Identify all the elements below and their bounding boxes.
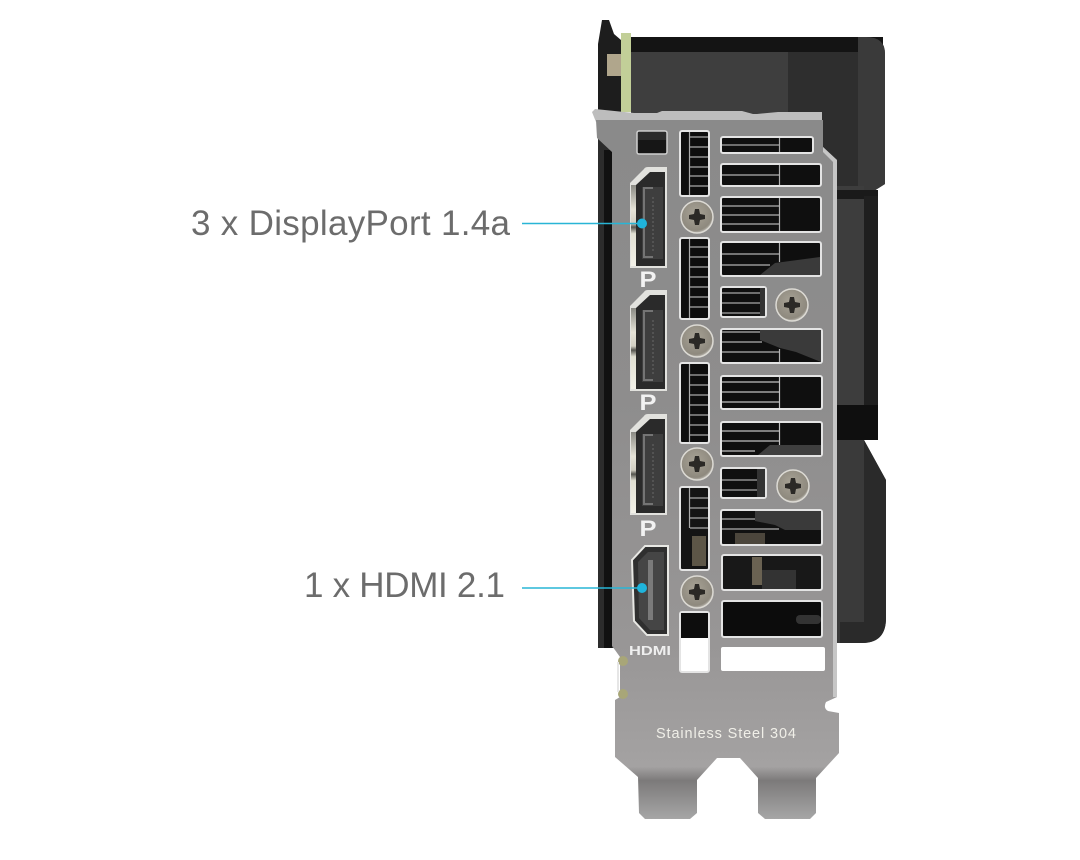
screw 6 <box>777 470 809 502</box>
bracket material label: Stainless Steel 304 <box>656 726 796 742</box>
vent column 2 <box>680 238 709 319</box>
slot 11 <box>722 555 822 590</box>
DisplayPort connector 3 <box>630 414 667 515</box>
callout: HDMI <box>304 566 647 605</box>
screw 2 <box>681 325 713 357</box>
slot 12 <box>722 601 822 637</box>
rear PCB and backplate edge <box>598 20 631 648</box>
DisplayPort logo 1: P <box>640 267 656 292</box>
stainless steel bracket plate <box>596 120 839 819</box>
label: HDMI: 1 x HDMI 2.1 <box>304 566 505 605</box>
mounting screws <box>681 201 809 608</box>
cooler shroud <box>631 37 886 643</box>
slot 1 <box>721 137 813 153</box>
bracket notch left <box>618 656 628 699</box>
screw 1 <box>681 201 713 233</box>
slot 6 <box>721 329 822 363</box>
leader dot: DisplayPort <box>637 218 647 228</box>
ventilation slots, column <box>680 131 709 672</box>
leader line: DisplayPort <box>522 222 642 224</box>
slot 4 <box>721 242 821 276</box>
label: DisplayPort: 3 x DisplayPort 1.4a <box>191 204 511 243</box>
vent column 3 <box>680 363 709 443</box>
screw 3 <box>681 448 713 480</box>
HDMI engraved label: HDMI <box>629 643 671 658</box>
callout: DisplayPort <box>191 204 647 243</box>
slot 8 <box>721 422 822 456</box>
slot 5 <box>721 287 766 317</box>
HDMI connector <box>632 546 668 635</box>
vent column 4 <box>680 487 709 570</box>
leader line: HDMI <box>522 587 642 589</box>
vent column 5 with open area <box>680 612 709 672</box>
top flange of bracket <box>592 109 822 122</box>
vent column 1 <box>680 131 709 196</box>
top small opening <box>637 131 667 154</box>
open slot <box>721 647 825 671</box>
slot 9 <box>721 468 766 498</box>
DisplayPort connector 2 <box>630 290 667 391</box>
screw 4 <box>681 576 713 608</box>
slot 7 <box>721 376 822 409</box>
DisplayPort logo 3: P <box>640 516 656 541</box>
ventilation slots, wide <box>721 137 825 671</box>
slot 10 <box>721 510 822 545</box>
screw 5 <box>776 289 808 321</box>
slot 2 <box>721 164 821 186</box>
bracket right edge highlight <box>823 147 837 697</box>
DisplayPort connector 1 <box>630 167 667 268</box>
DisplayPort logo 2: P <box>640 390 656 415</box>
leader dot: HDMI <box>637 583 647 593</box>
slot 3 <box>721 197 821 232</box>
